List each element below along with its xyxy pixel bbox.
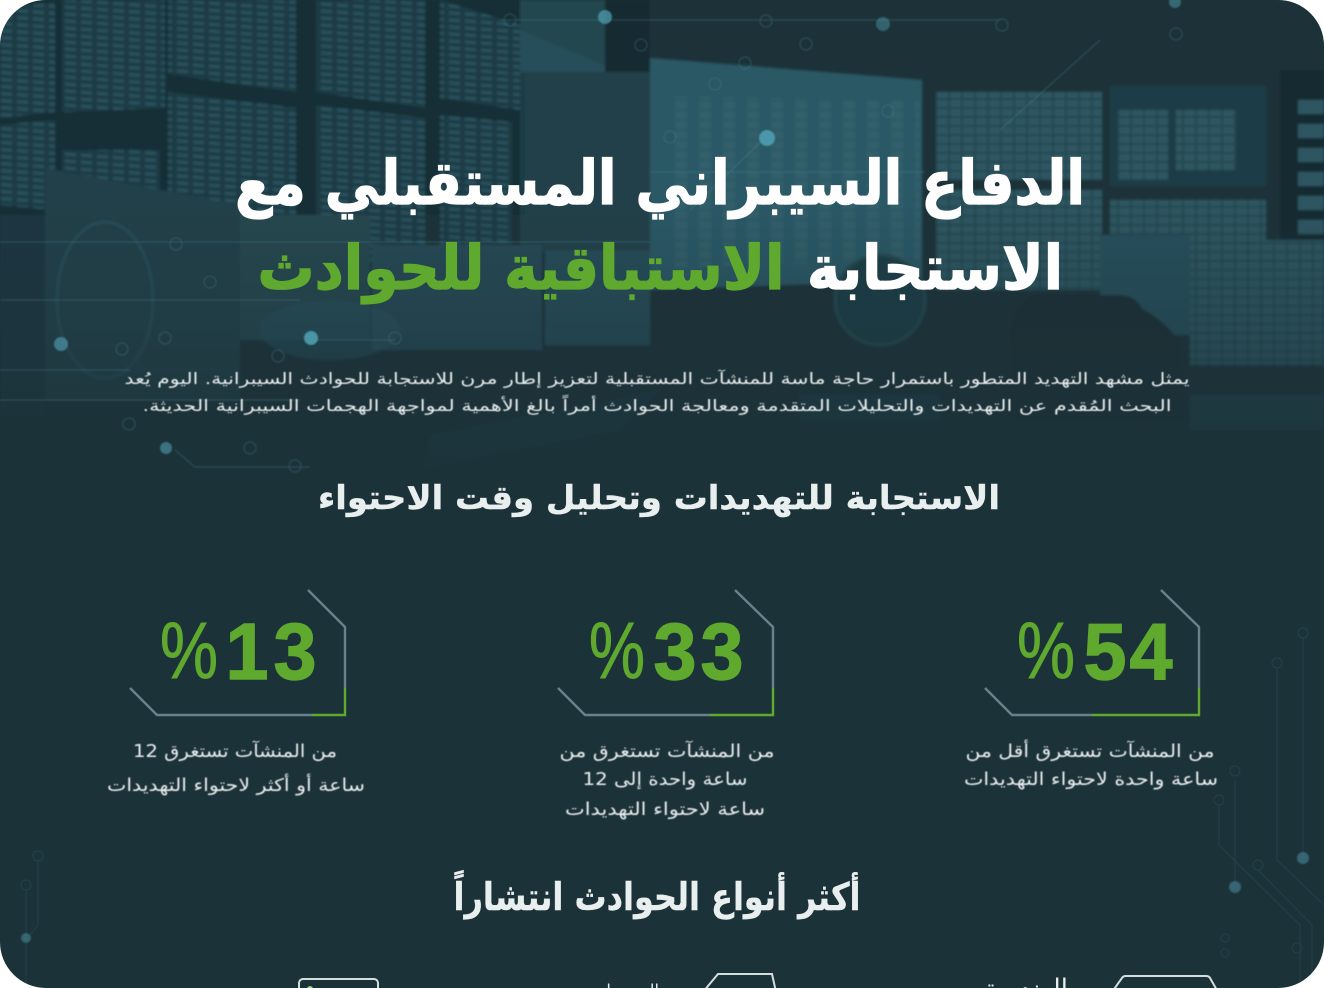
stat value 54: 5 <box>1084 607 1126 696</box>
title <box>235 148 1085 304</box>
stat caption 33 <box>560 740 774 820</box>
stat frame 33 <box>558 590 773 715</box>
stat caption 33: من المنشآت تستغرق من <box>560 740 774 762</box>
stat value 33: 3 <box>654 607 696 696</box>
title line 2 white: الاستجابة <box>807 233 1063 304</box>
intro text block: البحث المُقدم عن التهديدات والتحليلات المتقدمة ومعالجة الحوادث أمراً بالغ الأهمية لمواجهة الهجمات السيبرانية الحديثة. <box>142 395 1172 416</box>
intro text block <box>124 369 1190 416</box>
stat caption 54: من المنشآت تستغرق أقل من <box>966 739 1214 762</box>
stat value 13: 3 <box>274 607 316 696</box>
title line 2 green: الاستباقية للحوادث <box>258 233 784 304</box>
stat frame 13 <box>130 590 345 715</box>
percent sign 13: % <box>160 606 218 695</box>
stat caption 13 <box>107 740 365 796</box>
title line 1: الدفاع السيبراني المستقبلي مع <box>235 148 1085 219</box>
icon: incident type middle <box>703 974 776 988</box>
stat value 54: 4 <box>1130 607 1173 696</box>
stat caption 54 <box>964 739 1218 790</box>
icon: incident type left <box>299 979 378 988</box>
intro text block: يمثل مشهد التهديد المتطور باستمرار حاجة ماسة للمنشآت المستقبلية لتعزيز إطار مرن للاستجابة للحوادث السيبرانية. اليوم يُعد <box>124 369 1190 389</box>
stat caption 54: ساعة واحدة لاحتواء التهديدات <box>964 770 1218 790</box>
stat caption 13: ساعة أو أكثر لاحتواء التهديدات <box>107 773 365 796</box>
icon: incident type right <box>1112 976 1218 988</box>
stat caption 33: ساعة لاحتواء التهديدات <box>565 800 765 820</box>
stat: 33 percent <box>558 590 774 820</box>
percent sign 54: % <box>1017 606 1075 695</box>
stat: 13 percent <box>107 590 365 796</box>
stat caption 33: ساعة واحدة إلى 12 <box>582 770 748 790</box>
stat value 33 <box>654 622 742 681</box>
stat: 54 percent <box>964 590 1218 790</box>
heading: response and containment time: الاستجابة للتهديدات وتحليل وقت الاحتواء <box>318 478 1000 518</box>
stat caption 13: من المنشآت تستغرق 12 <box>133 740 337 762</box>
percent sign 33: % <box>589 606 645 695</box>
stat value 54 <box>1085 624 1173 681</box>
stat value 33: 3 <box>700 607 744 696</box>
heading: most common incident types: أكثر أنواع الحوادث انتشاراً <box>454 870 860 919</box>
stat value 13: 1 <box>226 607 268 696</box>
background photo: security operations centre <box>0 0 1324 381</box>
decorative circuit nodes <box>0 14 1182 472</box>
stat value 13 <box>230 622 314 681</box>
stat frame 54 <box>985 590 1199 715</box>
